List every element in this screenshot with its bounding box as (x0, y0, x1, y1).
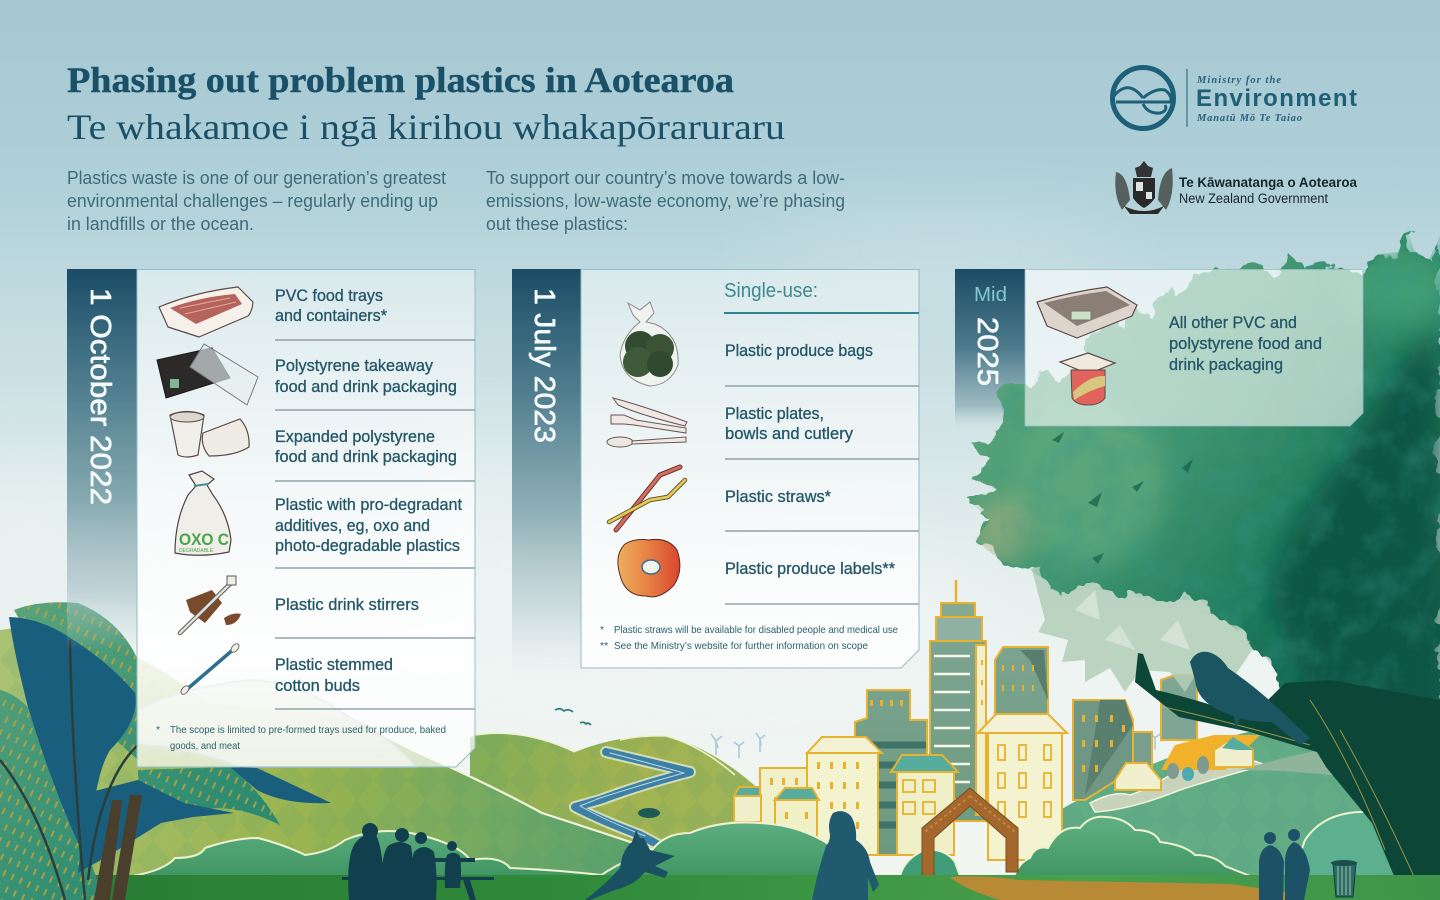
city buildings (734, 580, 1260, 860)
item: PVC food trays: PVC food trays (275, 287, 383, 305)
right hills (1060, 720, 1420, 885)
footnotes: Plastic straws will be available for disabled people and medical use (614, 624, 898, 636)
item: oxo degradable bag: Plastic with pro-degradant (275, 496, 462, 514)
grass (0, 875, 1440, 900)
item: cotton buds (179, 642, 393, 696)
footnote (156, 724, 446, 752)
clouds (0, 230, 1120, 660)
people picnic silhouette (342, 823, 494, 900)
title (67, 60, 785, 147)
panel sidebar (67, 269, 137, 650)
intro text right: out these plastics: (486, 214, 628, 234)
date label: 1 October 2022 (84, 288, 116, 505)
item: PVC food trays (159, 287, 388, 337)
small trees (1167, 756, 1209, 781)
footnotes: ** (600, 640, 608, 652)
item: description: polystyrene food and (1169, 335, 1322, 353)
intro text right: emissions, low-waste economy, we’re phasing (486, 191, 845, 211)
wharenui gateway (922, 788, 1018, 877)
sidebar: mid 2025: Mid (974, 284, 1007, 306)
item: PVC food trays: and containers* (275, 307, 388, 325)
item: cotton buds: cotton buds (275, 677, 360, 695)
intro text right: To support our country’s move towards a low- (486, 168, 845, 188)
windows (770, 700, 1125, 829)
intro text left: environmental challenges – regularly ending up (67, 191, 438, 211)
item: oxo degradable bag: OXO C (179, 530, 229, 549)
item: oxo degradable bag: additives, eg, oxo and (275, 517, 430, 535)
divider lines (275, 340, 475, 709)
heading: single-use: Single-use: (724, 280, 818, 302)
footnotes: See the Ministry’s website for further information on scope (614, 640, 868, 652)
river (575, 752, 690, 852)
landscape: hills and river (0, 628, 770, 885)
birds in flight (555, 709, 591, 725)
footnotes: * (600, 624, 604, 636)
sidebar: mid 2025 (955, 269, 1025, 429)
intro text left: in landfills or the ocean. (67, 214, 254, 234)
panel: 1 October 2022 (67, 269, 475, 767)
logo: Ministry for the Environment: Ministry for the (1196, 75, 1281, 86)
path (950, 876, 1294, 900)
item: produce bags: Plastic produce bags (725, 342, 873, 360)
item: produce bags (620, 302, 873, 386)
item: oxo degradable bag: DEGRADABLE (179, 548, 214, 554)
logo: New Zealand Government (1115, 161, 1357, 214)
logo: New Zealand Government: New Zealand Government (1179, 191, 1328, 206)
panel: mid 2025 (1025, 270, 1363, 426)
rubbish bin (1331, 860, 1357, 897)
intro text right (486, 168, 845, 234)
footnotes (600, 624, 898, 652)
item: expanded polystyrene: Expanded polystyrene (275, 428, 435, 446)
back towers (955, 580, 957, 604)
panel body (137, 270, 475, 767)
tree trunk and branch (1135, 653, 1440, 900)
item: cotton buds: Plastic stemmed (275, 656, 393, 674)
item: cutlery (607, 398, 854, 447)
item: straws: Plastic straws* (725, 488, 832, 506)
item: description (1169, 314, 1322, 374)
foliage leaves (1052, 432, 1193, 564)
item: description: drink packaging (1169, 356, 1283, 374)
item: drink stirrers (180, 576, 419, 633)
item: polystyrene takeaway (157, 344, 457, 405)
frisbee and dog (585, 808, 675, 900)
item: description: All other PVC and (1169, 314, 1297, 332)
couple silhouette (1259, 829, 1310, 900)
item: grey tray (1037, 287, 1137, 338)
item: cutlery: Plastic plates, (725, 405, 824, 423)
intro text left: Plastics waste is one of our generation’s greatest (67, 168, 446, 188)
footnote: The scope is limited to pre-formed trays used for produce, baked (170, 724, 446, 736)
panel body (581, 270, 919, 668)
pale foliage under canopy (1032, 550, 1280, 692)
item: cutlery: bowls and cutlery (725, 425, 854, 443)
item: expanded polystyrene: food and drink packaging (275, 448, 457, 466)
pale buildings (760, 768, 807, 855)
wind turbines (711, 733, 1160, 758)
panel: 1 July 2023 (512, 269, 919, 680)
logo: Ministry for the Environment: Manatū Mō Te Taiao (1196, 113, 1302, 124)
item: polystyrene takeaway: Polystyrene takeaway (275, 357, 434, 375)
item: expanded polystyrene (170, 412, 457, 466)
leaf plant (0, 602, 415, 900)
divider lines (725, 386, 919, 604)
logo: New Zealand Government: Te Kāwanatanga o Aotearoa (1179, 175, 1357, 190)
icon: coat of arms (1115, 161, 1173, 214)
item: produce labels: Plastic produce labels** (725, 560, 896, 578)
date label: 1 July 2023 (528, 288, 560, 443)
item: produce labels (618, 539, 896, 597)
intro text left (67, 168, 446, 234)
logo: Ministry for the Environment (1112, 68, 1357, 128)
title: Phasing out problem plastics in Aotearoa (67, 60, 734, 100)
footnote: goods, and meat (170, 740, 240, 752)
item: straws (609, 467, 832, 530)
footnote: * (156, 724, 160, 736)
title: Te whakamoe i ngā kirihou whakapōraruraru (67, 107, 785, 147)
item: drink stirrers: Plastic drink stirrers (275, 596, 419, 614)
panel body (1025, 270, 1363, 426)
item: oxo degradable bag: photo-degradable plastics (275, 537, 460, 555)
logo: Ministry for the Environment: Environment (1196, 85, 1357, 112)
panel sidebar (512, 269, 581, 680)
bird on branch (1190, 652, 1310, 745)
woman silhouette (812, 811, 879, 900)
item: yoghurt pot (1060, 353, 1115, 405)
item: oxo degradable bag (175, 471, 462, 555)
sidebar: mid 2025: 2025 (971, 317, 1003, 386)
bushes (133, 812, 1400, 876)
tree canopy (968, 190, 1440, 760)
item: polystyrene takeaway: food and drink packaging (275, 378, 457, 396)
